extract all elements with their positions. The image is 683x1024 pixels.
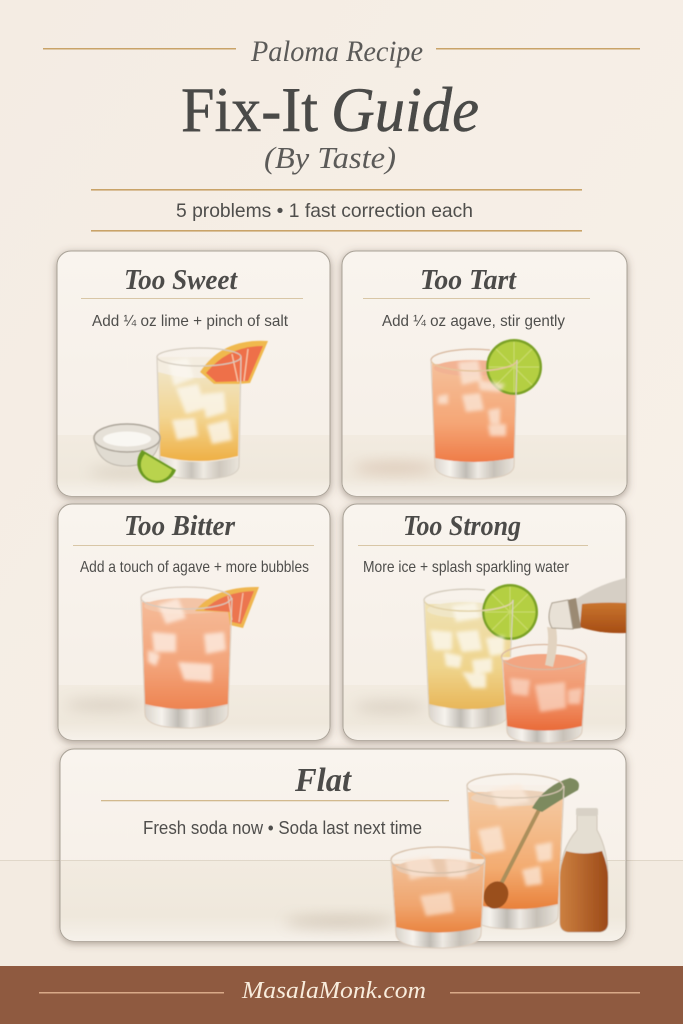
footer band bbox=[0, 966, 683, 1024]
tagline: 5 problems • 1 fast correction each bbox=[176, 200, 473, 222]
icon: lime wheel bbox=[486, 339, 542, 395]
heading: too bitter: Too Bitter bbox=[124, 511, 236, 542]
header bbox=[43, 35, 640, 232]
icon: grapefruit wedge bbox=[200, 341, 268, 384]
title: Fix-It Guide: Fix-It bbox=[181, 74, 318, 145]
icon: lime wheel bbox=[482, 584, 538, 640]
icon: pouring soda bottle bbox=[545, 578, 626, 667]
icon: lime wedge bbox=[137, 450, 176, 483]
panel: too sweet bbox=[57, 251, 330, 496]
panel: too bitter bbox=[58, 504, 330, 740]
illustration: pale cocktail with grapefruit bbox=[157, 341, 268, 479]
heading: flat: Flat bbox=[294, 762, 352, 799]
icon: bar spoon bbox=[479, 778, 579, 913]
icon: syrup bottle bbox=[560, 808, 608, 932]
panel: too strong bbox=[343, 504, 626, 743]
icon: grapefruit wedge bbox=[195, 587, 259, 628]
text: too bitter fix: Add a touch of agave + more bubbles bbox=[80, 559, 309, 576]
eyebrow: Paloma Recipe: Paloma Recipe bbox=[250, 35, 423, 68]
heading: too tart: Too Tart bbox=[420, 265, 517, 296]
heading: too strong: Too Strong bbox=[403, 511, 521, 542]
illustration: short cocktail bbox=[391, 847, 485, 948]
footer: website: MasalaMonk.com bbox=[241, 978, 426, 1004]
heading: too sweet: Too Sweet bbox=[124, 265, 238, 296]
illustration: tall cocktail with spoon bbox=[467, 774, 579, 929]
illustration: orange cocktail being topped up bbox=[502, 644, 587, 743]
illustration: pale cocktail with lime wheel bbox=[424, 584, 538, 728]
text: too strong fix: More ice + splash sparkling water bbox=[363, 559, 570, 576]
title: Fix-It Guide bbox=[181, 74, 479, 145]
text: flat fix: Fresh soda now • Soda last next time bbox=[143, 818, 422, 838]
text: too tart fix: Add ¼ oz agave, stir gently bbox=[382, 313, 565, 330]
panel: flat bbox=[60, 749, 626, 948]
panel: too tart bbox=[342, 251, 627, 496]
subtitle: By Taste: (By Taste) bbox=[264, 140, 396, 175]
text: too sweet fix: Add ¼ oz lime + pinch of salt bbox=[92, 313, 289, 330]
title: Fix-It Guide: Guide bbox=[331, 74, 479, 145]
illustration: orange cocktail with lime wheel bbox=[431, 339, 542, 479]
icon: salt bowl bbox=[94, 424, 160, 466]
illustration: bubbly cocktail with grapefruit bbox=[141, 587, 259, 728]
